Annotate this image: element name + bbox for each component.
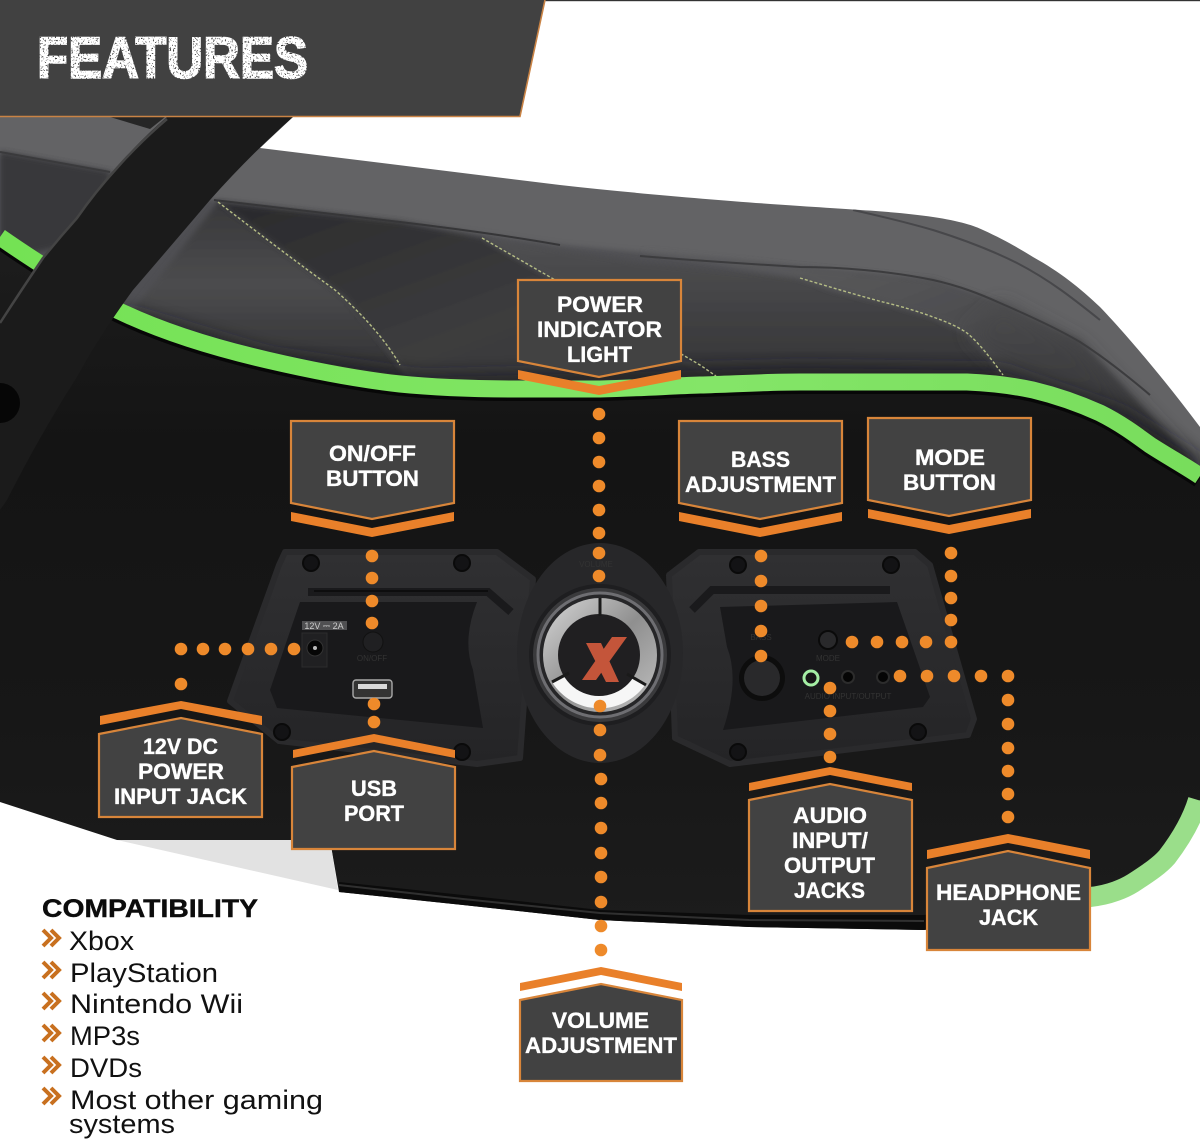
item: nintendo wii: Nintendo Wii <box>70 989 243 1019</box>
callout: 12v dc power input jack: POWER <box>138 759 224 784</box>
faint panel labels: MODE <box>816 654 840 663</box>
callout: on/off button: ON/OFF <box>329 441 416 466</box>
item: mp3s: MP3s <box>70 1021 140 1051</box>
left window <box>270 602 483 728</box>
callout: usb port: USB <box>351 776 397 801</box>
callout: mode button <box>868 418 1031 534</box>
right window <box>720 602 930 730</box>
callout: audio input/output jacks: AUDIO <box>793 803 867 828</box>
mode button <box>819 631 837 649</box>
leader: bass <box>755 550 767 662</box>
item: dvds: DVDs <box>70 1053 142 1083</box>
callout: bass adjustment: BASS <box>731 447 790 472</box>
control panel <box>230 543 974 764</box>
leader: mode <box>846 547 957 648</box>
centre hub <box>517 543 683 763</box>
callout: volume adjustment <box>520 967 682 1081</box>
on/off button <box>363 632 383 652</box>
callout: power indicator light: INDICATOR <box>537 317 662 342</box>
seat cushion <box>0 117 1200 466</box>
gaming chair seat photo <box>0 117 1200 930</box>
leader: power indicator <box>593 408 605 582</box>
compatibility list <box>42 895 323 1139</box>
leader: on/off <box>366 550 378 629</box>
callout: mode button: MODE <box>915 445 985 470</box>
item: xbox <box>43 926 135 956</box>
plate ridges <box>308 592 511 612</box>
callout: audio input/output jacks: JACKS <box>794 878 865 903</box>
usb port <box>353 680 392 698</box>
white underside wedge <box>117 840 338 890</box>
callout: audio input/output jacks: OUTPUT <box>784 853 876 878</box>
callout: 12v dc power input jack: INPUT JACK <box>114 784 247 809</box>
faint panel labels <box>357 560 891 701</box>
leader: usb <box>368 698 380 728</box>
callout: 12v dc power input jack <box>99 701 262 817</box>
callout: headphone jack <box>927 834 1090 950</box>
item: most other gaming systems <box>43 1085 323 1139</box>
screws <box>274 555 926 760</box>
item: xbox: Xbox <box>69 926 135 956</box>
right plate <box>669 552 974 764</box>
title: FEATURES <box>37 26 308 91</box>
dotted leader lines <box>175 408 1014 956</box>
leader: volume <box>594 700 607 956</box>
callout: power indicator light: LIGHT <box>567 342 633 367</box>
cushion creases <box>0 152 1150 395</box>
callout: bass adjustment <box>679 421 842 537</box>
callout: usb port: PORT <box>344 801 405 826</box>
callout: audio input/output jacks: INPUT/ <box>792 828 868 853</box>
leader: headphone <box>894 670 1014 823</box>
leader: 12v jack <box>175 643 300 690</box>
faint panel labels: BASS <box>750 633 772 642</box>
stitching seams <box>218 202 1003 376</box>
callout: volume adjustment: VOLUME <box>552 1008 649 1033</box>
power jack: 12V ⎓ 2A <box>304 621 344 631</box>
faint panel labels: AUDIO INPUT/OUTPUT <box>805 692 891 701</box>
item: most other gaming systems: Most other gaming <box>70 1085 323 1115</box>
callout: on/off button: BUTTON <box>326 466 419 491</box>
faint panel labels: VOLUME <box>579 560 613 569</box>
left plate <box>230 552 533 764</box>
compatibility heading: COMPATIBILITY <box>42 895 258 923</box>
faint panel labels: ON/OFF <box>357 654 387 663</box>
callout: headphone jack: HEADPHONE <box>936 880 1081 905</box>
arm strap <box>0 117 293 510</box>
callout: bass adjustment: ADJUSTMENT <box>685 472 837 497</box>
green piping bottom right <box>1090 800 1198 897</box>
seat side panel <box>0 237 1200 930</box>
item: playstation: PlayStation <box>70 958 218 988</box>
leader: audio <box>824 682 836 763</box>
callout: audio input/output jacks <box>749 767 912 911</box>
bottom seam <box>339 882 1090 930</box>
callout: power indicator light: POWER <box>557 292 643 317</box>
header banner <box>0 0 545 116</box>
item: most other gaming systems: systems <box>69 1109 175 1139</box>
callout: headphone jack: JACK <box>979 905 1038 930</box>
callout: on/off button <box>291 421 454 537</box>
callout: usb port <box>292 734 455 849</box>
X logo <box>582 637 627 682</box>
callout: power indicator light <box>518 280 681 395</box>
callout: volume adjustment: ADJUSTMENT <box>525 1033 678 1058</box>
callout: 12v dc power input jack: 12V DC <box>143 734 218 759</box>
power jack <box>302 621 347 667</box>
green piping top <box>0 237 1200 478</box>
audio jacks <box>804 671 889 685</box>
callout: mode button: BUTTON <box>903 470 996 495</box>
bass knob <box>739 655 785 701</box>
volume dial <box>531 586 669 724</box>
